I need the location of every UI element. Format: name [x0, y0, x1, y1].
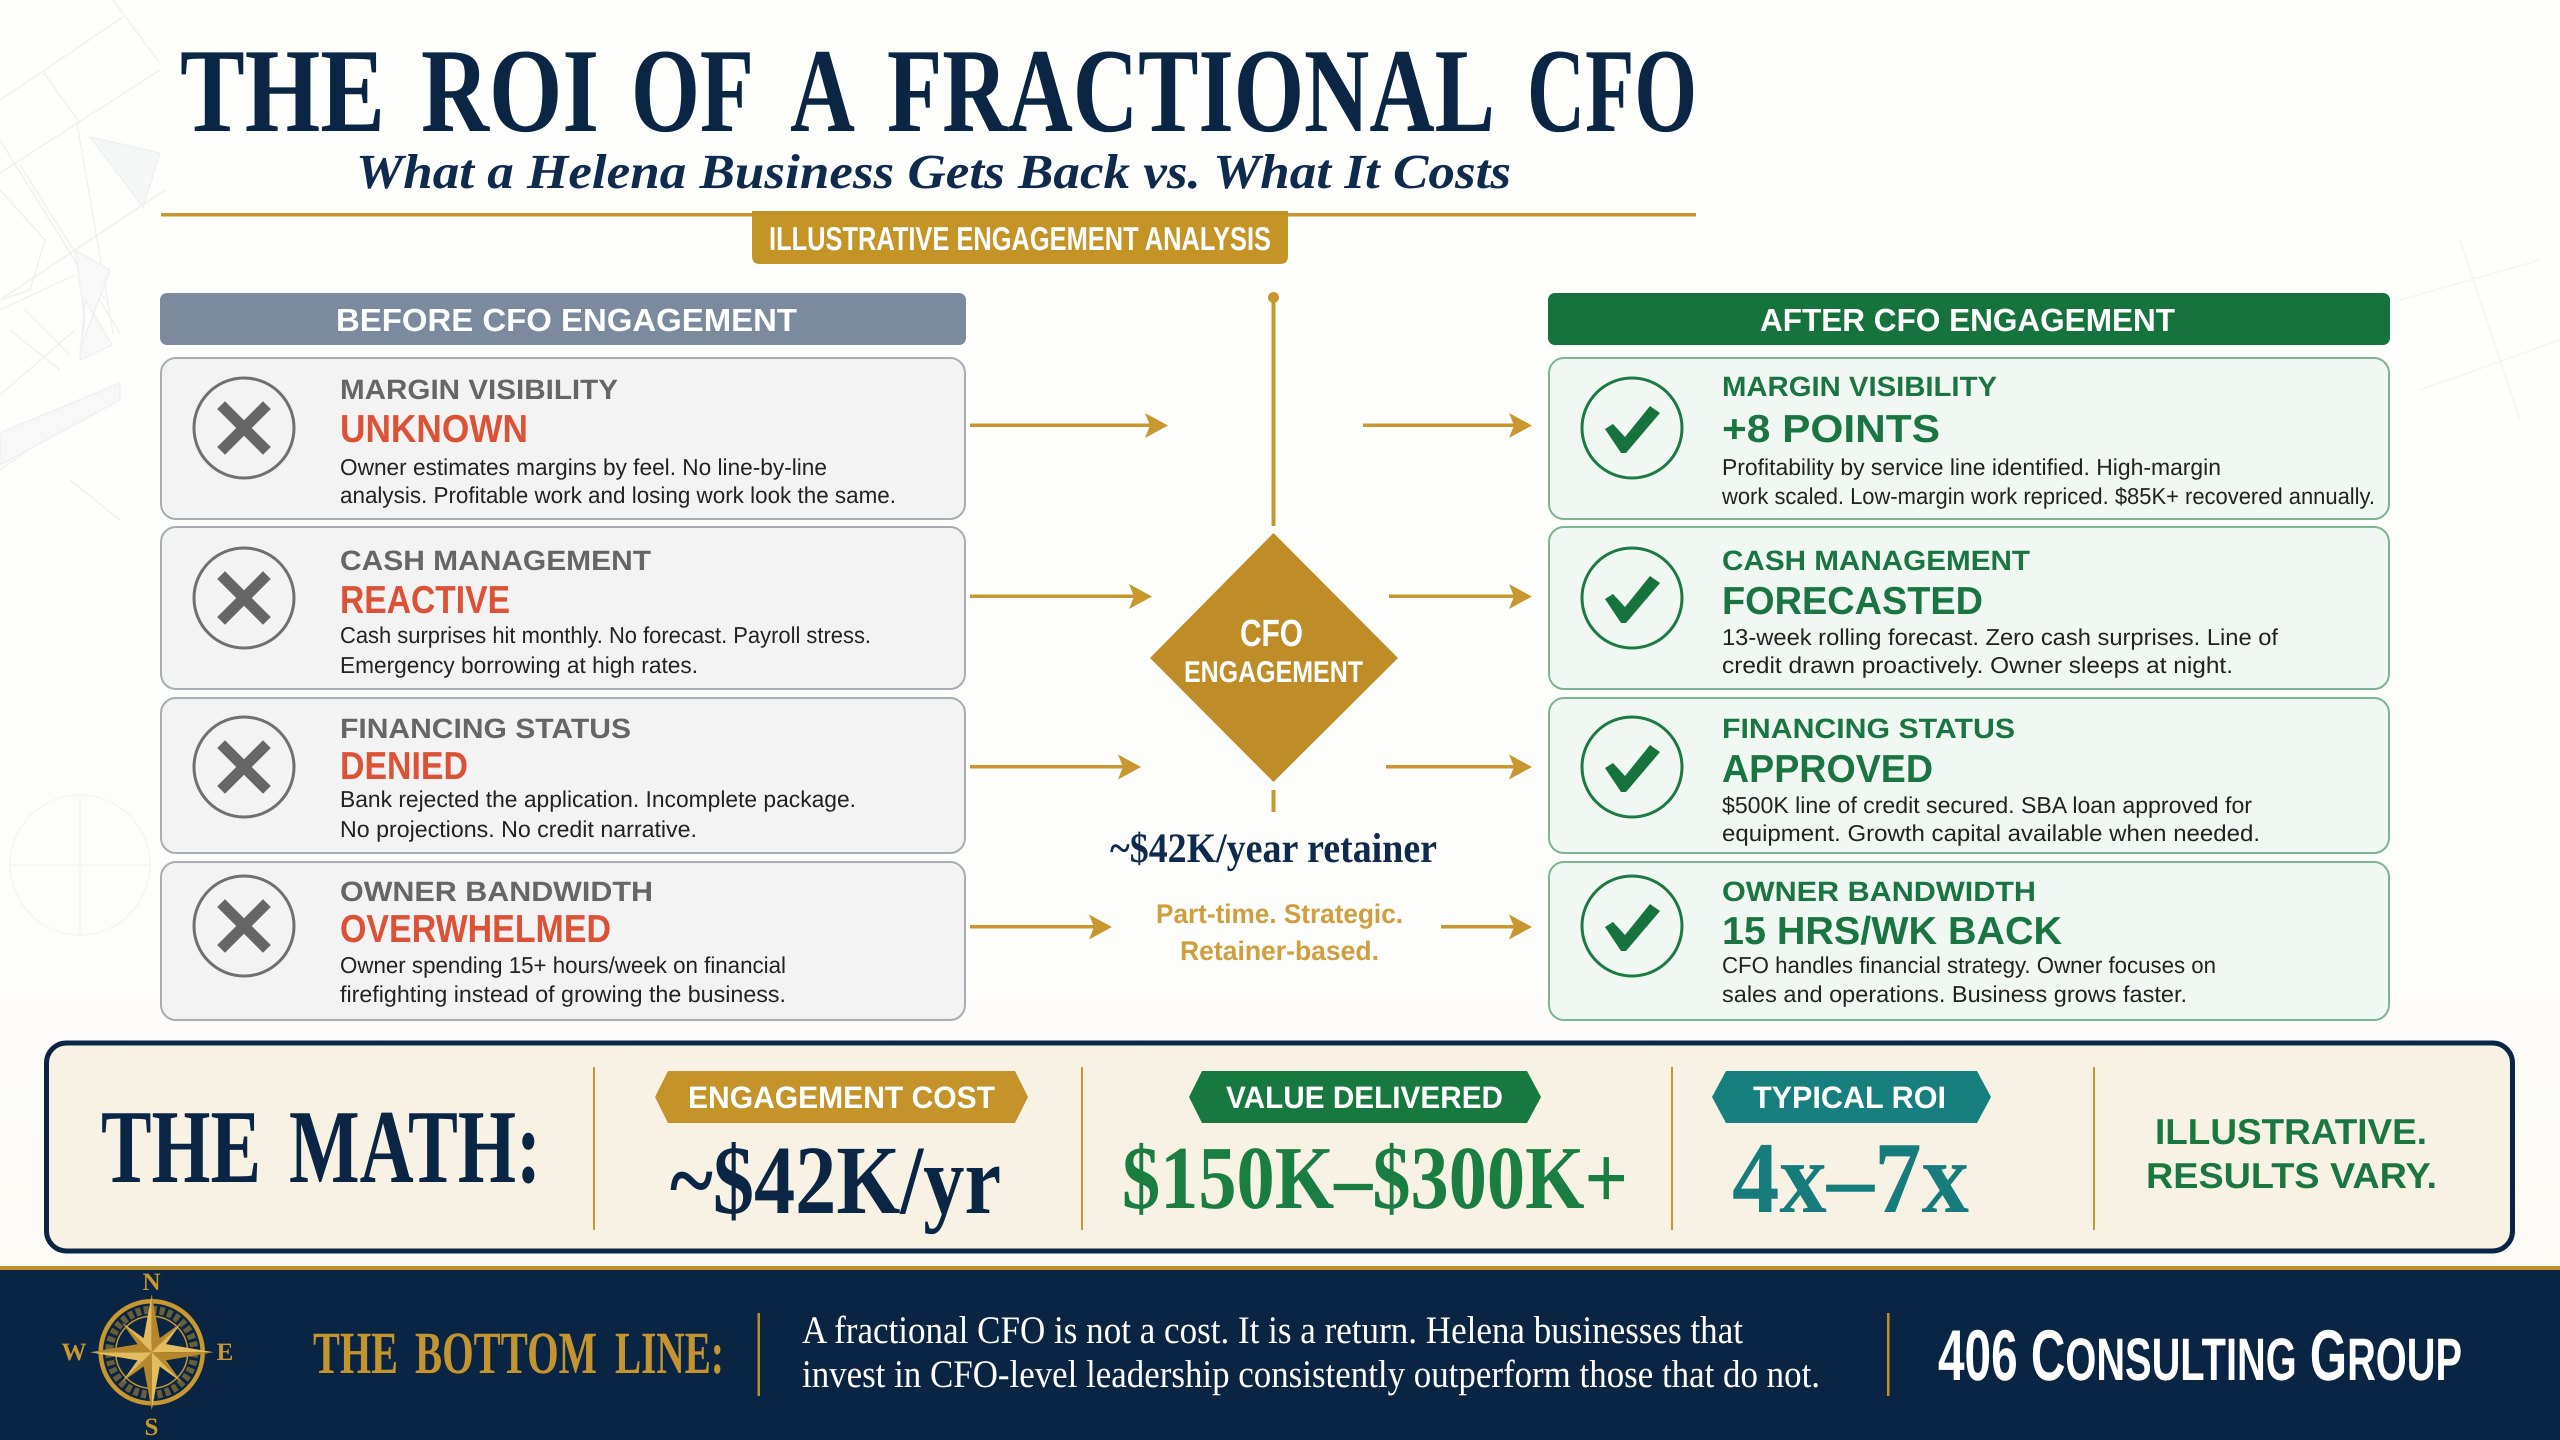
header: before: [160, 293, 966, 345]
bottom line heading: THE: [313, 1320, 398, 1386]
card: financing status before: No projections. No credit narrative.: [340, 816, 697, 842]
card: margin visibility before: MARGIN VISIBILITY: [340, 374, 618, 405]
card: owner bandwidth after: sales and operations. Business grows faster.: [1722, 981, 2187, 1007]
card: owner bandwidth after: 15 HRS/WK BACK: [1722, 910, 2062, 953]
compass letters: E: [217, 1339, 233, 1366]
figure: value delivered: $150K–$300K+: [1122, 1129, 1628, 1228]
card: cash management after: CASH MANAGEMENT: [1722, 545, 2030, 576]
card: margin visibility before: UNKNOWN: [340, 408, 528, 451]
bottom line heading: BOTTOM: [415, 1320, 597, 1386]
header: before: BEFORE CFO ENGAGEMENT: [336, 302, 797, 338]
arrow: financing out of CFO: [1386, 754, 1532, 780]
icon: x mark: [194, 717, 294, 817]
math heading: [101, 1088, 541, 1205]
figure: typical ROI: 4x–7x: [1732, 1122, 1969, 1235]
badge: value delivered: VALUE DELIVERED: [1226, 1080, 1503, 1115]
card: cash management before: [161, 527, 965, 689]
gold title rule: [161, 213, 1696, 216]
icon: x mark: [194, 378, 294, 478]
compass letters: [62, 1269, 233, 1440]
panel: the math: [46, 1043, 2512, 1251]
title: FRACTIONAL: [887, 24, 1495, 157]
figure: engagement cost: ~$42K/yr: [670, 1127, 1001, 1235]
card: owner bandwidth before: OWNER BANDWIDTH: [340, 876, 653, 907]
card: financing status before: Bank rejected the application. Incomplete package.: [340, 786, 856, 812]
arrow: bandwidth out of CFO: [1441, 914, 1532, 940]
card: margin visibility after: MARGIN VISIBILITY: [1722, 371, 1997, 402]
header: after: AFTER CFO ENGAGEMENT: [1760, 302, 2175, 338]
badge: value delivered: [1189, 1071, 1541, 1123]
arrow: margin out of CFO: [1363, 413, 1532, 438]
title: [180, 24, 1697, 157]
card: financing status before: FINANCING STATUS: [340, 713, 631, 744]
badge: engagement cost: [655, 1071, 1028, 1123]
retainer note: Part-time. Strategic.: [1156, 899, 1403, 929]
compass letters: W: [62, 1339, 86, 1366]
card: financing status after: APPROVED: [1722, 748, 1933, 791]
card: owner bandwidth after: CFO handles financial strategy. Owner focuses on: [1722, 952, 2216, 978]
subtitle: What a Helena Business Gets Back vs. What It Costs: [356, 144, 1511, 199]
panel: after CFO engagement: [1548, 293, 2390, 1020]
bottom line statement: invest in CFO-level leadership consistently outperform those that do not.: [802, 1353, 1820, 1396]
disclaimer: ILLUSTRATIVE.: [2155, 1111, 2427, 1152]
arrow: bandwidth into CFO: [970, 914, 1112, 940]
title: CFO: [1527, 24, 1697, 157]
bottom line heading: LINE:: [615, 1320, 724, 1386]
background: faint blueprint sketch: [0, 0, 2560, 935]
card: margin visibility after: Profitability by service line identified. High-margin: [1722, 454, 2221, 480]
card: cash management before: Emergency borrowing at high rates.: [340, 652, 698, 678]
card: financing status before: [161, 698, 965, 853]
math heading: THE: [101, 1088, 261, 1205]
icon: check mark: [1582, 548, 1682, 648]
arrow: margin into CFO: [970, 413, 1168, 438]
card: financing status after: equipment. Growth capital available when needed.: [1722, 820, 2260, 846]
retainer note: [1156, 899, 1403, 966]
card: owner bandwidth before: OVERWHELMED: [340, 908, 611, 951]
title: A: [790, 24, 855, 157]
bottom line statement: A fractional CFO is not a cost. It is a return. Helena businesses that: [802, 1309, 1743, 1352]
icon: check mark: [1582, 876, 1682, 976]
card: cash management after: FORECASTED: [1722, 580, 1983, 623]
retainer note: Retainer-based.: [1180, 936, 1379, 966]
disclaimer: RESULTS VARY.: [2146, 1155, 2437, 1196]
diamond: CFO engagement: ENGAGEMENT: [1184, 656, 1363, 689]
card: margin visibility before: [161, 358, 965, 519]
card: cash management after: credit drawn proactively. Owner sleeps at night.: [1722, 652, 2233, 678]
vertical connector with dot: [1268, 292, 1279, 526]
card: cash management before: REACTIVE: [340, 579, 510, 622]
badge: typical ROI: [1712, 1071, 1991, 1123]
badge: illustrative engagement analysis: ILLUSTRATIVE ENGAGEMENT ANALYSIS: [769, 220, 1271, 257]
icon: check mark: [1582, 717, 1682, 817]
icon: check mark: [1582, 378, 1682, 478]
card: cash management after: [1549, 527, 2389, 689]
compass letters: N: [142, 1269, 161, 1296]
connector below diamond: [1272, 790, 1276, 812]
card: owner bandwidth after: [1549, 862, 2389, 1020]
card: cash management after: 13-week rolling forecast. Zero cash surprises. Line of: [1722, 624, 2279, 650]
badge: illustrative engagement analysis: [752, 211, 1288, 264]
bottom line statement: [802, 1309, 1820, 1396]
card: margin visibility before: analysis. Profitable work and losing work look the same.: [340, 482, 896, 508]
card: margin visibility after: [1549, 358, 2389, 519]
icon: x mark: [194, 548, 294, 648]
card: owner bandwidth before: [161, 862, 965, 1020]
card: margin visibility after: work scaled. Low-margin work repriced. $85K+ recovered annually.: [1721, 483, 2375, 509]
card: financing status after: FINANCING STATUS: [1722, 713, 2015, 744]
arrow: financing into CFO: [970, 754, 1141, 780]
diamond: CFO engagement: [1150, 533, 1398, 782]
badge: engagement cost: ENGAGEMENT COST: [688, 1080, 995, 1115]
icon: x mark: [194, 876, 294, 976]
disclaimer: [2146, 1111, 2437, 1196]
header: after: [1548, 293, 2390, 345]
card: cash management before: Cash surprises hit monthly. No forecast. Payroll stress.: [340, 622, 871, 648]
title: THE: [180, 24, 385, 157]
retainer price: ~$42K/year retainer: [1110, 826, 1437, 872]
card: margin visibility before: Owner estimates margins by feel. No line-by-line: [340, 454, 827, 480]
panel: before CFO engagement: [160, 293, 966, 1020]
card: financing status after: $500K line of credit secured. SBA loan approved for: [1722, 792, 2252, 818]
card: financing status before: DENIED: [340, 745, 468, 788]
card: owner bandwidth before: firefighting instead of growing the business.: [340, 981, 786, 1007]
arrow: cash into CFO: [970, 584, 1152, 609]
center: CFO engagement flow: [1110, 292, 1437, 966]
title: ROI: [421, 24, 599, 157]
card: financing status after: [1549, 698, 2389, 853]
footer band: the bottom line: [0, 1266, 2560, 1440]
math heading: MATH:: [289, 1088, 541, 1205]
card: owner bandwidth before: Owner spending 15+ hours/week on financial: [340, 952, 786, 978]
icon: compass rose: [90, 1294, 214, 1410]
card: owner bandwidth after: OWNER BANDWIDTH: [1722, 876, 2036, 907]
title: OF: [631, 24, 754, 157]
card: cash management before: CASH MANAGEMENT: [340, 545, 651, 576]
card: margin visibility after: +8 POINTS: [1722, 408, 1940, 451]
bottom line heading: [313, 1320, 724, 1386]
arrow: cash out of CFO: [1389, 584, 1532, 609]
badge: typical ROI: TYPICAL ROI: [1753, 1080, 1946, 1115]
diamond: CFO engagement: CFO: [1240, 613, 1303, 655]
brand: 406 Consulting Group: 406 CONSULTING GROUP: [1938, 1316, 2462, 1396]
